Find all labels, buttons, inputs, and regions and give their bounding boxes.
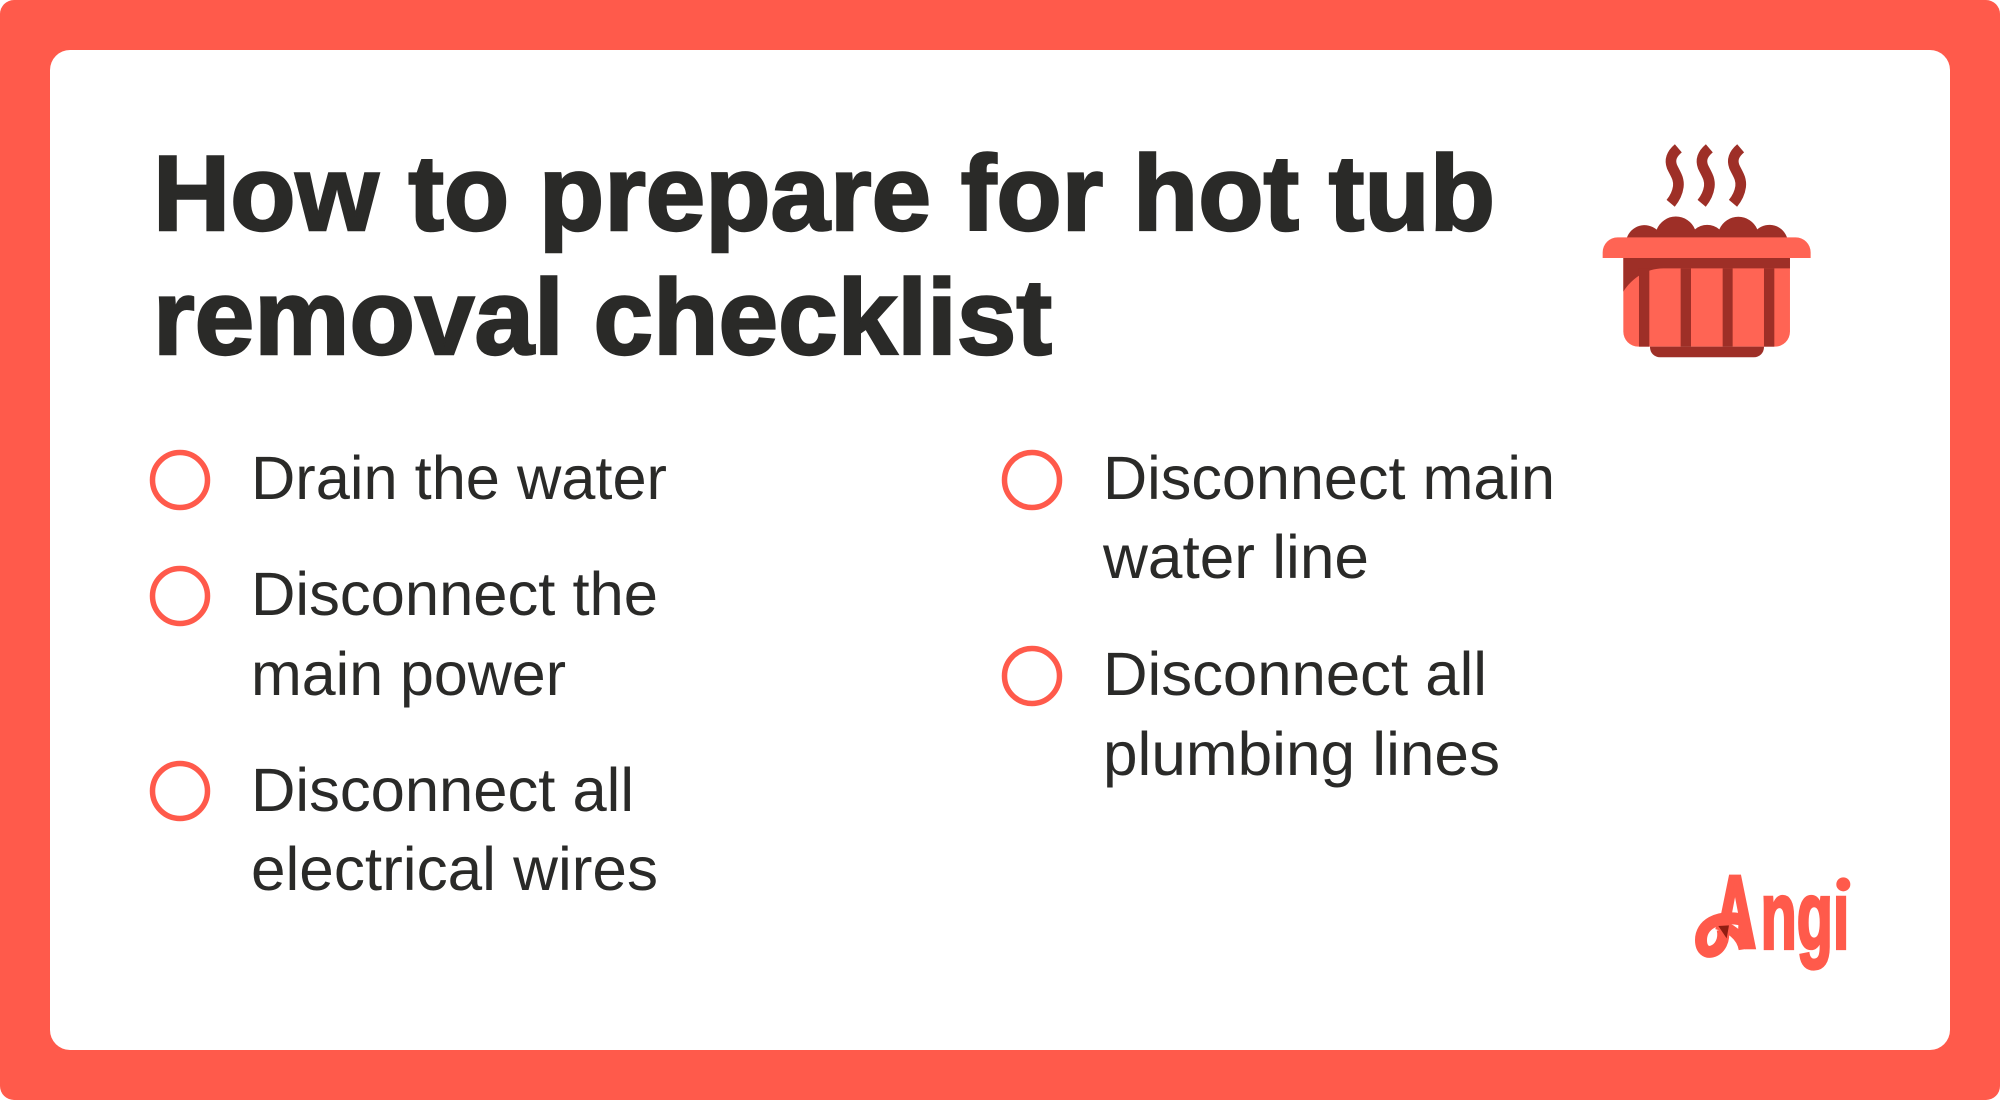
icon: tub body xyxy=(1623,257,1790,347)
item: disconnect all electrical wires: electrical wires xyxy=(251,835,658,903)
item: drain the water: Drain the water xyxy=(251,444,667,512)
item: disconnect all plumbing lines: Disconnect all xyxy=(1103,640,1487,708)
checklist: left column xyxy=(152,444,667,903)
icon: tub rim xyxy=(1603,237,1811,258)
item: disconnect all plumbing lines: plumbing lines xyxy=(1103,720,1500,788)
icon: tub slats xyxy=(1639,268,1774,347)
item: disconnect all plumbing lines xyxy=(1004,640,1500,788)
item: disconnect main water line: water line xyxy=(1102,523,1369,591)
icon: bubbles xyxy=(1627,217,1787,238)
checklist: right column xyxy=(1004,444,1555,788)
item: disconnect the main power xyxy=(152,560,658,708)
item: disconnect main water line xyxy=(1004,444,1555,591)
icon: tub base xyxy=(1650,347,1764,357)
item: disconnect all electrical wires: Disconnect all xyxy=(251,756,634,824)
icon: tub shadow band xyxy=(1623,257,1790,292)
logo: Angi xyxy=(1695,874,1850,971)
title: How to prepare for hot tub xyxy=(153,133,1495,253)
title: removal checklist xyxy=(153,257,1052,377)
logo: Angi: ngi xyxy=(1761,862,1849,969)
icon: steam xyxy=(1671,148,1741,203)
item: disconnect the main power: main power xyxy=(251,640,566,708)
item: disconnect all electrical wires xyxy=(152,756,658,903)
icon: hot tub with steam xyxy=(1603,148,1811,357)
title xyxy=(153,133,1495,377)
item: disconnect the main power: Disconnect the xyxy=(251,560,658,628)
item: disconnect main water line: Disconnect main xyxy=(1103,444,1555,512)
logo: Angi: A xyxy=(1714,855,1756,969)
